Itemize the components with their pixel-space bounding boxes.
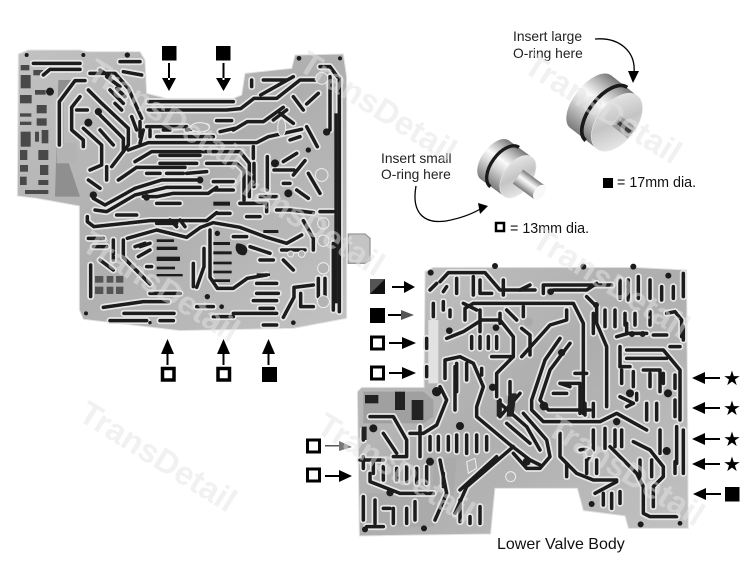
plate outline [17, 50, 347, 331]
piston: large [557, 65, 653, 161]
watermarks: TransDetail [311, 405, 481, 531]
lower channels [360, 273, 683, 527]
lower channel highlights [360, 273, 683, 527]
watermarks: TransDetail [221, 157, 391, 283]
small O-ring [479, 139, 519, 187]
lower pale bores [467, 449, 593, 482]
callout text: small O-ring: Insert small [381, 151, 452, 166]
piston: small [470, 132, 558, 215]
casting recess [55, 80, 80, 197]
side tab [348, 234, 370, 263]
watermarks: TransDetail [541, 407, 711, 533]
left grid pockets [20, 65, 48, 194]
callout text: large O-ring: O-ring here [513, 46, 583, 61]
lower body right markers [692, 368, 741, 502]
lower body right markers: ★ [723, 368, 741, 390]
legend: 17mm: = 17mm dia. [617, 175, 696, 191]
lower body right markers: ★ [723, 429, 741, 451]
plate outline [357, 267, 688, 536]
callout text: small O-ring: O-ring here [381, 167, 451, 182]
lower body right markers: ★ [723, 454, 741, 476]
bottom-left pockets [95, 276, 123, 294]
upper body top markers [162, 46, 231, 91]
upper solid bars [157, 113, 338, 303]
upper channels [33, 62, 339, 325]
callout text: large O-ring: Insert large [513, 29, 582, 44]
lower body left markers [308, 279, 416, 482]
upper channel highlights [33, 62, 339, 325]
large O-ring [572, 77, 627, 141]
lower body right markers: ★ [723, 398, 741, 420]
lower port holes [362, 263, 682, 532]
caption: Lower Valve Body [497, 536, 625, 553]
callout arrow: small O-ring [415, 186, 488, 222]
watermarks: TransDetail [518, 45, 688, 171]
lower valve body plate [357, 263, 688, 536]
upper pale bores [191, 72, 329, 308]
upper body bottom markers [161, 339, 277, 382]
lower upper-left dark pockets [362, 392, 517, 440]
legend: 13mm: = 13mm dia. [510, 221, 589, 237]
callout arrow: large O-ring [595, 39, 639, 83]
lower casting recesses [363, 392, 433, 423]
watermarks: TransDetail [293, 43, 463, 169]
upper port holes [25, 52, 342, 325]
upper valve body plate [17, 50, 370, 331]
watermarks: TransDetail [526, 219, 696, 345]
watermarks: TransDetail [81, 51, 251, 177]
watermarks: TransDetail [73, 393, 243, 519]
watermarks: TransDetail [76, 223, 246, 349]
watermarks [73, 43, 711, 533]
